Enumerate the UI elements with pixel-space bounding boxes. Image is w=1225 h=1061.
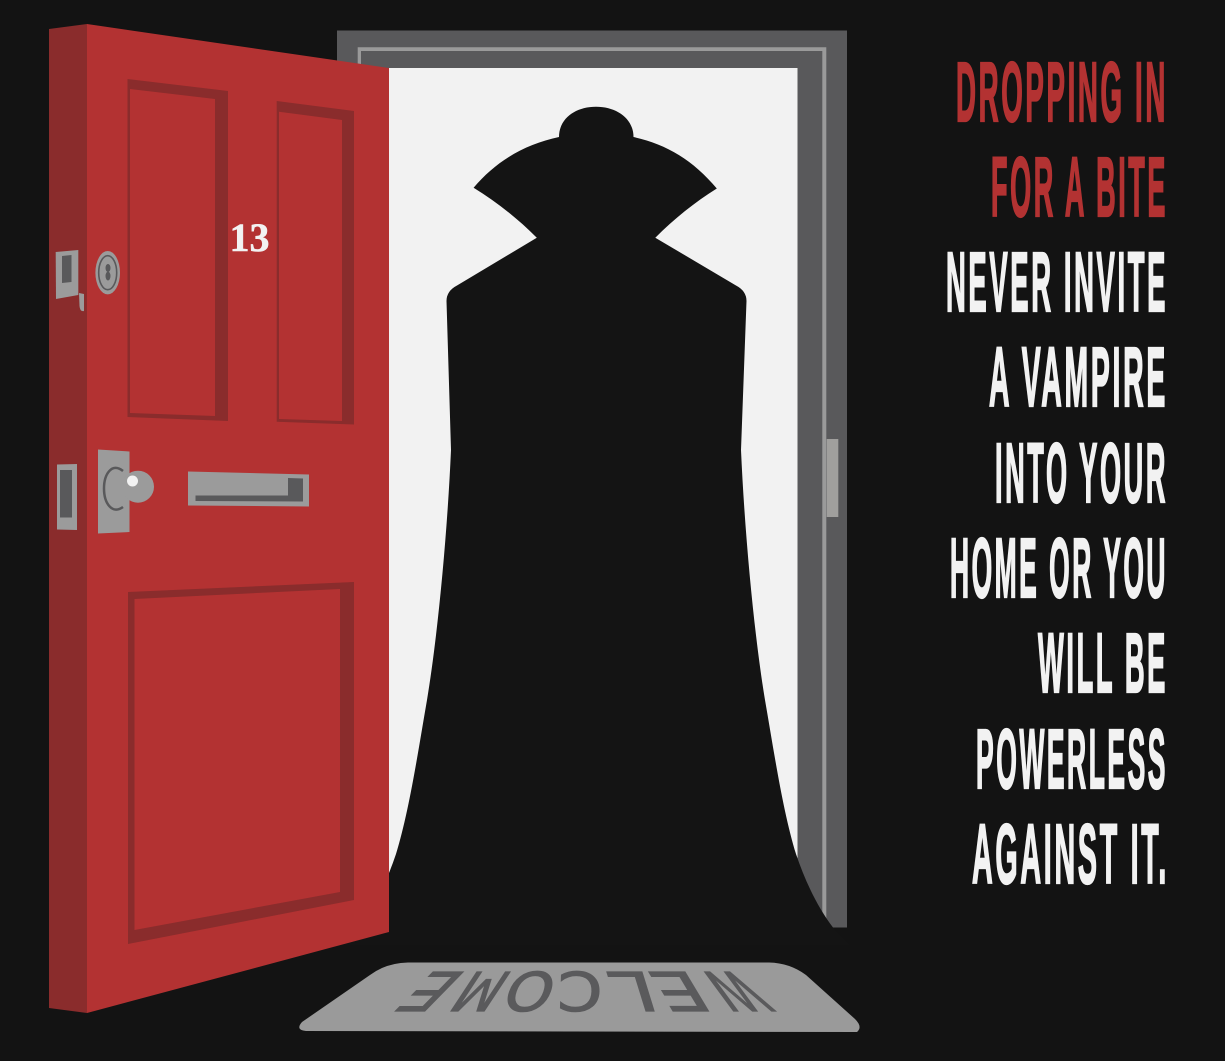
vampire silhouette — [340, 107, 850, 945]
mat lettering: E — [381, 959, 482, 1021]
mat lettering: O — [496, 959, 565, 1022]
door — [49, 24, 389, 1013]
lower panel — [128, 582, 354, 944]
upper right panel — [277, 101, 354, 424]
door face — [87, 24, 389, 1013]
welcome mat — [299, 959, 860, 1032]
strike plate — [827, 439, 838, 517]
door frame — [337, 30, 847, 928]
door edge — [49, 24, 87, 1013]
lower latch plate — [57, 464, 77, 530]
mail slot — [188, 472, 309, 506]
message text — [946, 235, 1169, 901]
mat lettering: E — [636, 959, 722, 1021]
mat lettering: M — [439, 959, 524, 1021]
door knob — [98, 450, 154, 534]
mat lettering — [381, 959, 787, 1022]
upper left panel — [128, 79, 228, 421]
door number: 13 — [230, 215, 270, 260]
mat lettering: C — [557, 959, 603, 1022]
deadbolt lock — [95, 251, 120, 294]
heading — [956, 45, 1168, 234]
upper latch plate — [56, 250, 84, 311]
mat lettering: L — [603, 959, 665, 1022]
doorway light — [389, 68, 798, 888]
mat lettering: W — [682, 959, 787, 1021]
